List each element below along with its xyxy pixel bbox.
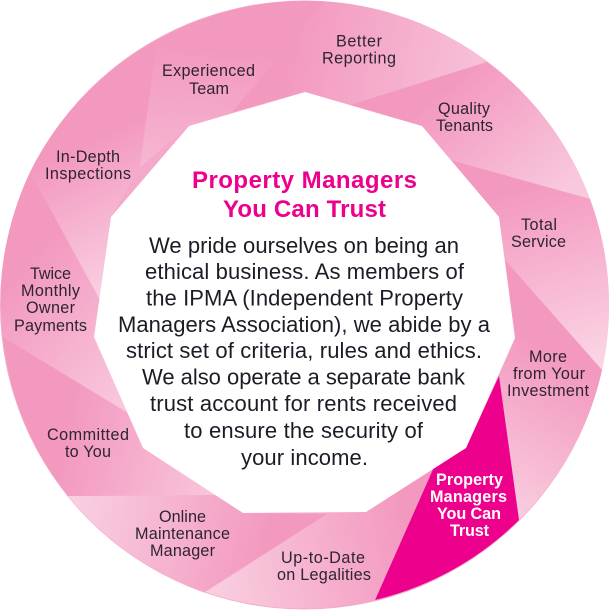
segment: Twice Monthly Owner Payments: Monthly [21, 282, 81, 300]
segment: Twice Monthly Owner Payments: Owner [26, 299, 76, 317]
segment: Twice Monthly Owner Payments [1, 172, 128, 413]
segment: Online Maintenance Manager: Online [159, 508, 206, 526]
segment: Experienced Team: Team [189, 80, 229, 98]
segment: More from Your Investment: from Your [513, 365, 586, 383]
segment: Twice Monthly Owner Payments: Twice [30, 265, 71, 283]
segment: More from Your Investment: More [529, 348, 567, 366]
segment: Total Service: Total [521, 216, 557, 234]
segment: Better Reporting: Reporting [322, 50, 396, 68]
central white hendecagon [94, 92, 515, 513]
segment: Quality Tenants: Tenants [436, 117, 493, 135]
segment: Property Managers You Can Trust (highlighted): Trust [450, 522, 490, 540]
segment: Committed to You [3, 337, 217, 496]
body text: to ensure the security of [184, 418, 424, 443]
body text: Managers Association), we abide by a [118, 312, 491, 337]
segment: Committed to You: Committed [47, 426, 129, 444]
title [192, 167, 417, 223]
segment: Experienced Team [140, 1, 325, 167]
segment: Better Reporting [232, 2, 487, 112]
segment: In-Depth Inspections [30, 40, 157, 300]
segment: More from Your Investment [499, 260, 602, 520]
segment: Total Service: Service [511, 233, 566, 251]
body text: We also operate a separate bank [142, 364, 466, 390]
segment: Property Managers You Can Trust (highlighted) [375, 376, 519, 600]
segment: Quality Tenants [350, 62, 590, 199]
segment: In-Depth Inspections: Inspections [45, 165, 131, 183]
body text: strict set of criteria, rules and ethics. [126, 338, 482, 363]
segment: Twice Monthly Owner Payments: Payments [14, 317, 87, 335]
segment: Better Reporting: Better [336, 32, 383, 50]
segment: Property Managers You Can Trust (highlighted): Managers [430, 488, 507, 506]
body text [118, 233, 491, 470]
body text: the IPMA (Independent Property [146, 286, 463, 310]
body text: trust account for rents received [150, 391, 457, 416]
segment: Property Managers You Can Trust (highlighted): You Can [437, 505, 501, 523]
segment: Committed to You: to You [65, 443, 111, 461]
title: You Can Trust [223, 196, 386, 223]
segment: Up-to-Date on Legalities: Up-to-Date [281, 549, 365, 567]
segment: In-Depth Inspections: In-Depth [56, 148, 120, 166]
segment: More from Your Investment: Investment [507, 382, 590, 400]
segment: Total Service [450, 160, 609, 370]
body text: ethical business. As members of [145, 259, 465, 284]
segment: Property Managers You Can Trust (highlighted): Property [436, 471, 503, 489]
title: Property Managers [192, 167, 417, 194]
body text: your income. [241, 445, 368, 470]
segment: Up-to-Date on Legalities [205, 467, 434, 608]
body text: We pride ourselves on being an [149, 233, 459, 258]
segment: Online Maintenance Manager [68, 495, 327, 592]
segment: Online Maintenance Manager: Maintenance [135, 525, 230, 543]
segment: Up-to-Date on Legalities: on Legalities [277, 566, 371, 584]
segment: Quality Tenants: Quality [438, 100, 491, 118]
segment: Online Maintenance Manager: Manager [150, 542, 216, 560]
segment: Experienced Team: Experienced [162, 62, 255, 80]
